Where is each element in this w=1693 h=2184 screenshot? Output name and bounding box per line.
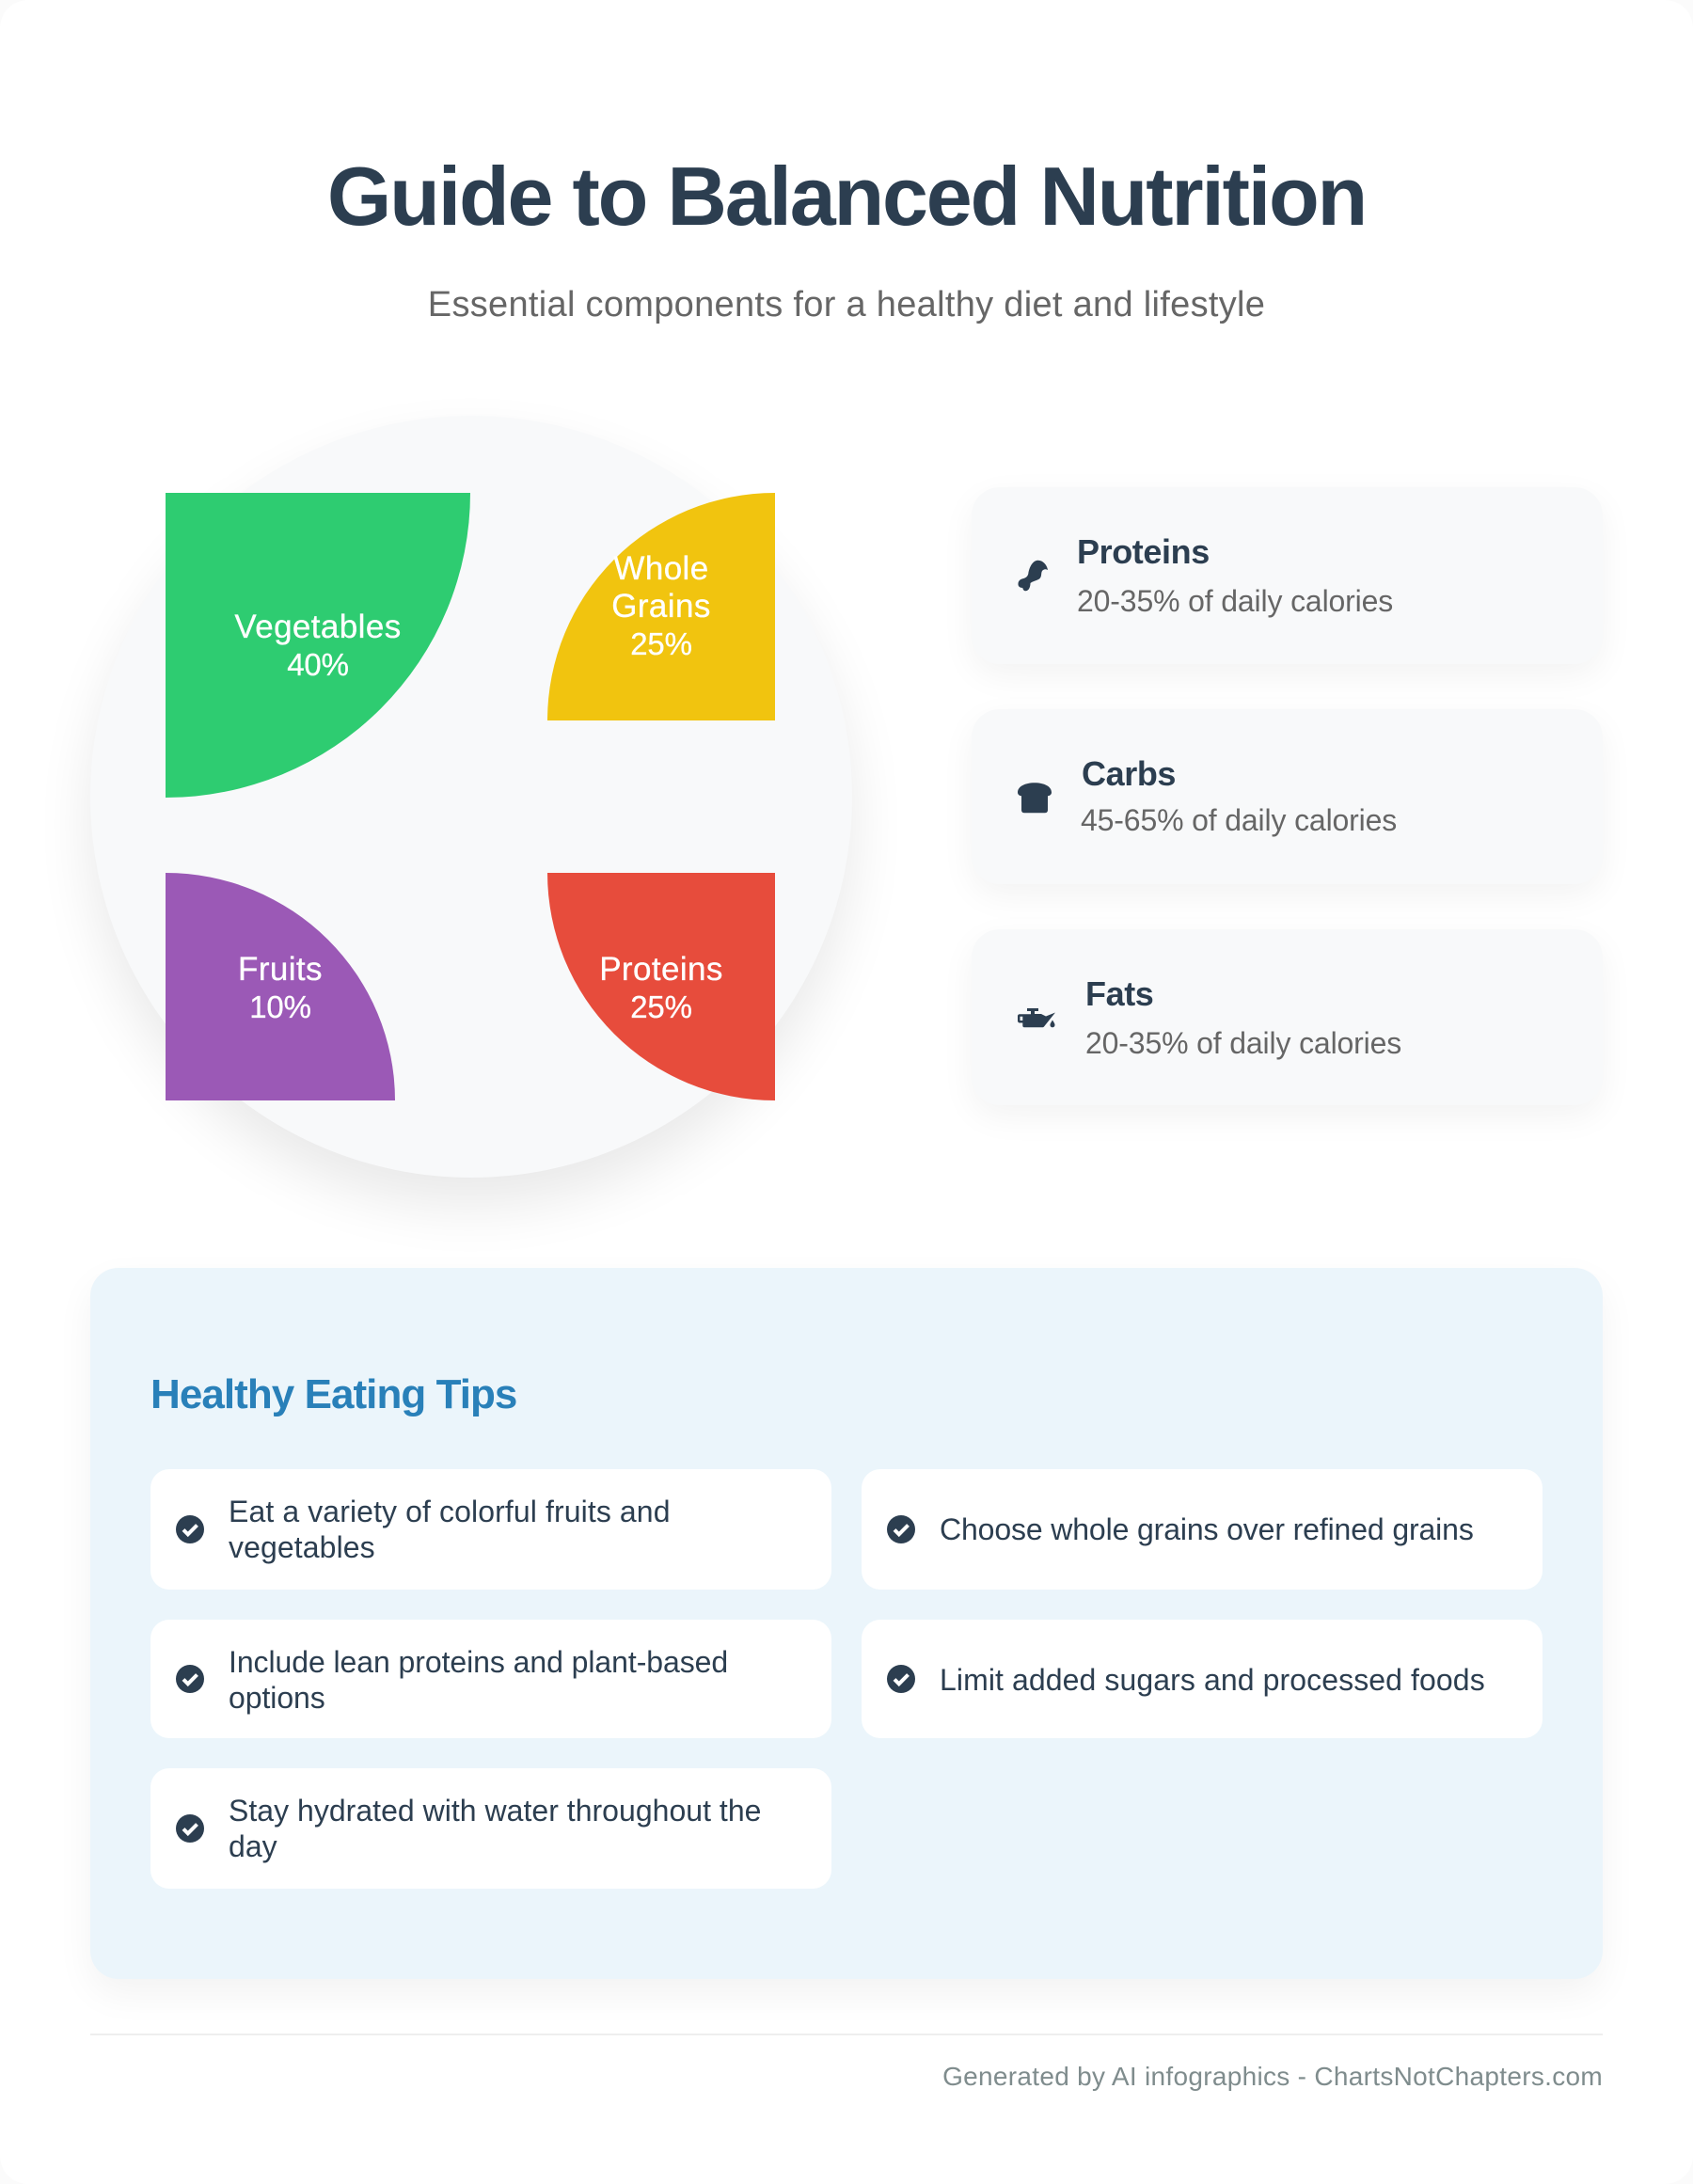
plate circle <box>90 416 852 1178</box>
icon: check <box>887 1665 915 1693</box>
text: tip 3: options <box>229 1681 325 1715</box>
label: fruits: 10% <box>249 989 311 1024</box>
text: tip 4: Limit added sugars and processed foods <box>940 1663 1485 1697</box>
slice: vegetables <box>166 493 470 798</box>
title: Guide to Balanced Nutrition <box>327 150 1366 243</box>
label: whole grains: 25% <box>630 626 692 661</box>
panel: proteins card <box>972 487 1603 664</box>
heading: carbs: Carbs <box>1082 754 1176 793</box>
text: proteins range: 20-35% of daily calories <box>1077 584 1393 618</box>
icon: check <box>887 1515 915 1543</box>
panel: fats card <box>972 929 1603 1105</box>
slice: proteins <box>547 873 775 1100</box>
icon: drumstick <box>1018 561 1048 591</box>
text: tip 1: Eat a variety of colorful fruits and <box>229 1495 671 1528</box>
label: fruits <box>238 951 323 1024</box>
label: whole grains: Grains <box>611 588 711 625</box>
heading: tips: Healthy Eating Tips <box>150 1371 516 1417</box>
text: tip 3 <box>229 1645 728 1715</box>
icon: check <box>176 1814 204 1843</box>
label: proteins: Proteins <box>599 951 723 988</box>
icon: oil can <box>1018 1008 1055 1027</box>
tip 5 <box>150 1768 831 1889</box>
footer credit: Generated by AI infographics - ChartsNotChapters.com <box>942 2062 1603 2091</box>
icon: check <box>176 1665 204 1693</box>
tip 2 <box>862 1469 1543 1590</box>
text: tip 1: vegetables <box>229 1530 375 1564</box>
heading: proteins: Proteins <box>1077 532 1210 571</box>
text: tip 5: day <box>229 1829 277 1863</box>
text: tip 5 <box>229 1794 761 1863</box>
label: vegetables: 40% <box>287 647 349 682</box>
label: fruits: Fruits <box>238 951 323 988</box>
text: tip 5: Stay hydrated with water throughout the <box>229 1794 761 1828</box>
text: tip 2: Choose whole grains over refined grains <box>940 1512 1474 1546</box>
tip 3 <box>150 1620 831 1738</box>
label: vegetables <box>234 609 402 682</box>
icon: bread <box>1018 783 1052 813</box>
label: proteins: 25% <box>630 989 692 1024</box>
text: carbs range: 45-65% of daily calories <box>1081 803 1397 837</box>
panel: carbs card <box>972 709 1603 884</box>
icon: check <box>176 1515 204 1543</box>
label: vegetables: Vegetables <box>234 609 402 645</box>
label: whole grains: Whole <box>613 550 709 587</box>
slice: fruits <box>166 873 395 1100</box>
text: fats range: 20-35% of daily calories <box>1085 1026 1401 1060</box>
label: proteins <box>599 951 723 1024</box>
tip 1 <box>150 1469 831 1590</box>
label: whole grains <box>611 550 711 661</box>
tip 4 <box>862 1620 1543 1738</box>
text: tip 3: Include lean proteins and plant-based <box>229 1645 728 1679</box>
heading: fats: Fats <box>1085 974 1153 1013</box>
slice: whole grains <box>547 493 775 720</box>
panel: healthy eating tips <box>90 1268 1603 1979</box>
chart: nutrition plate <box>83 493 860 1213</box>
subtitle: Essential components for a healthy diet and lifestyle <box>428 285 1265 324</box>
text: tip 1 <box>229 1495 671 1564</box>
